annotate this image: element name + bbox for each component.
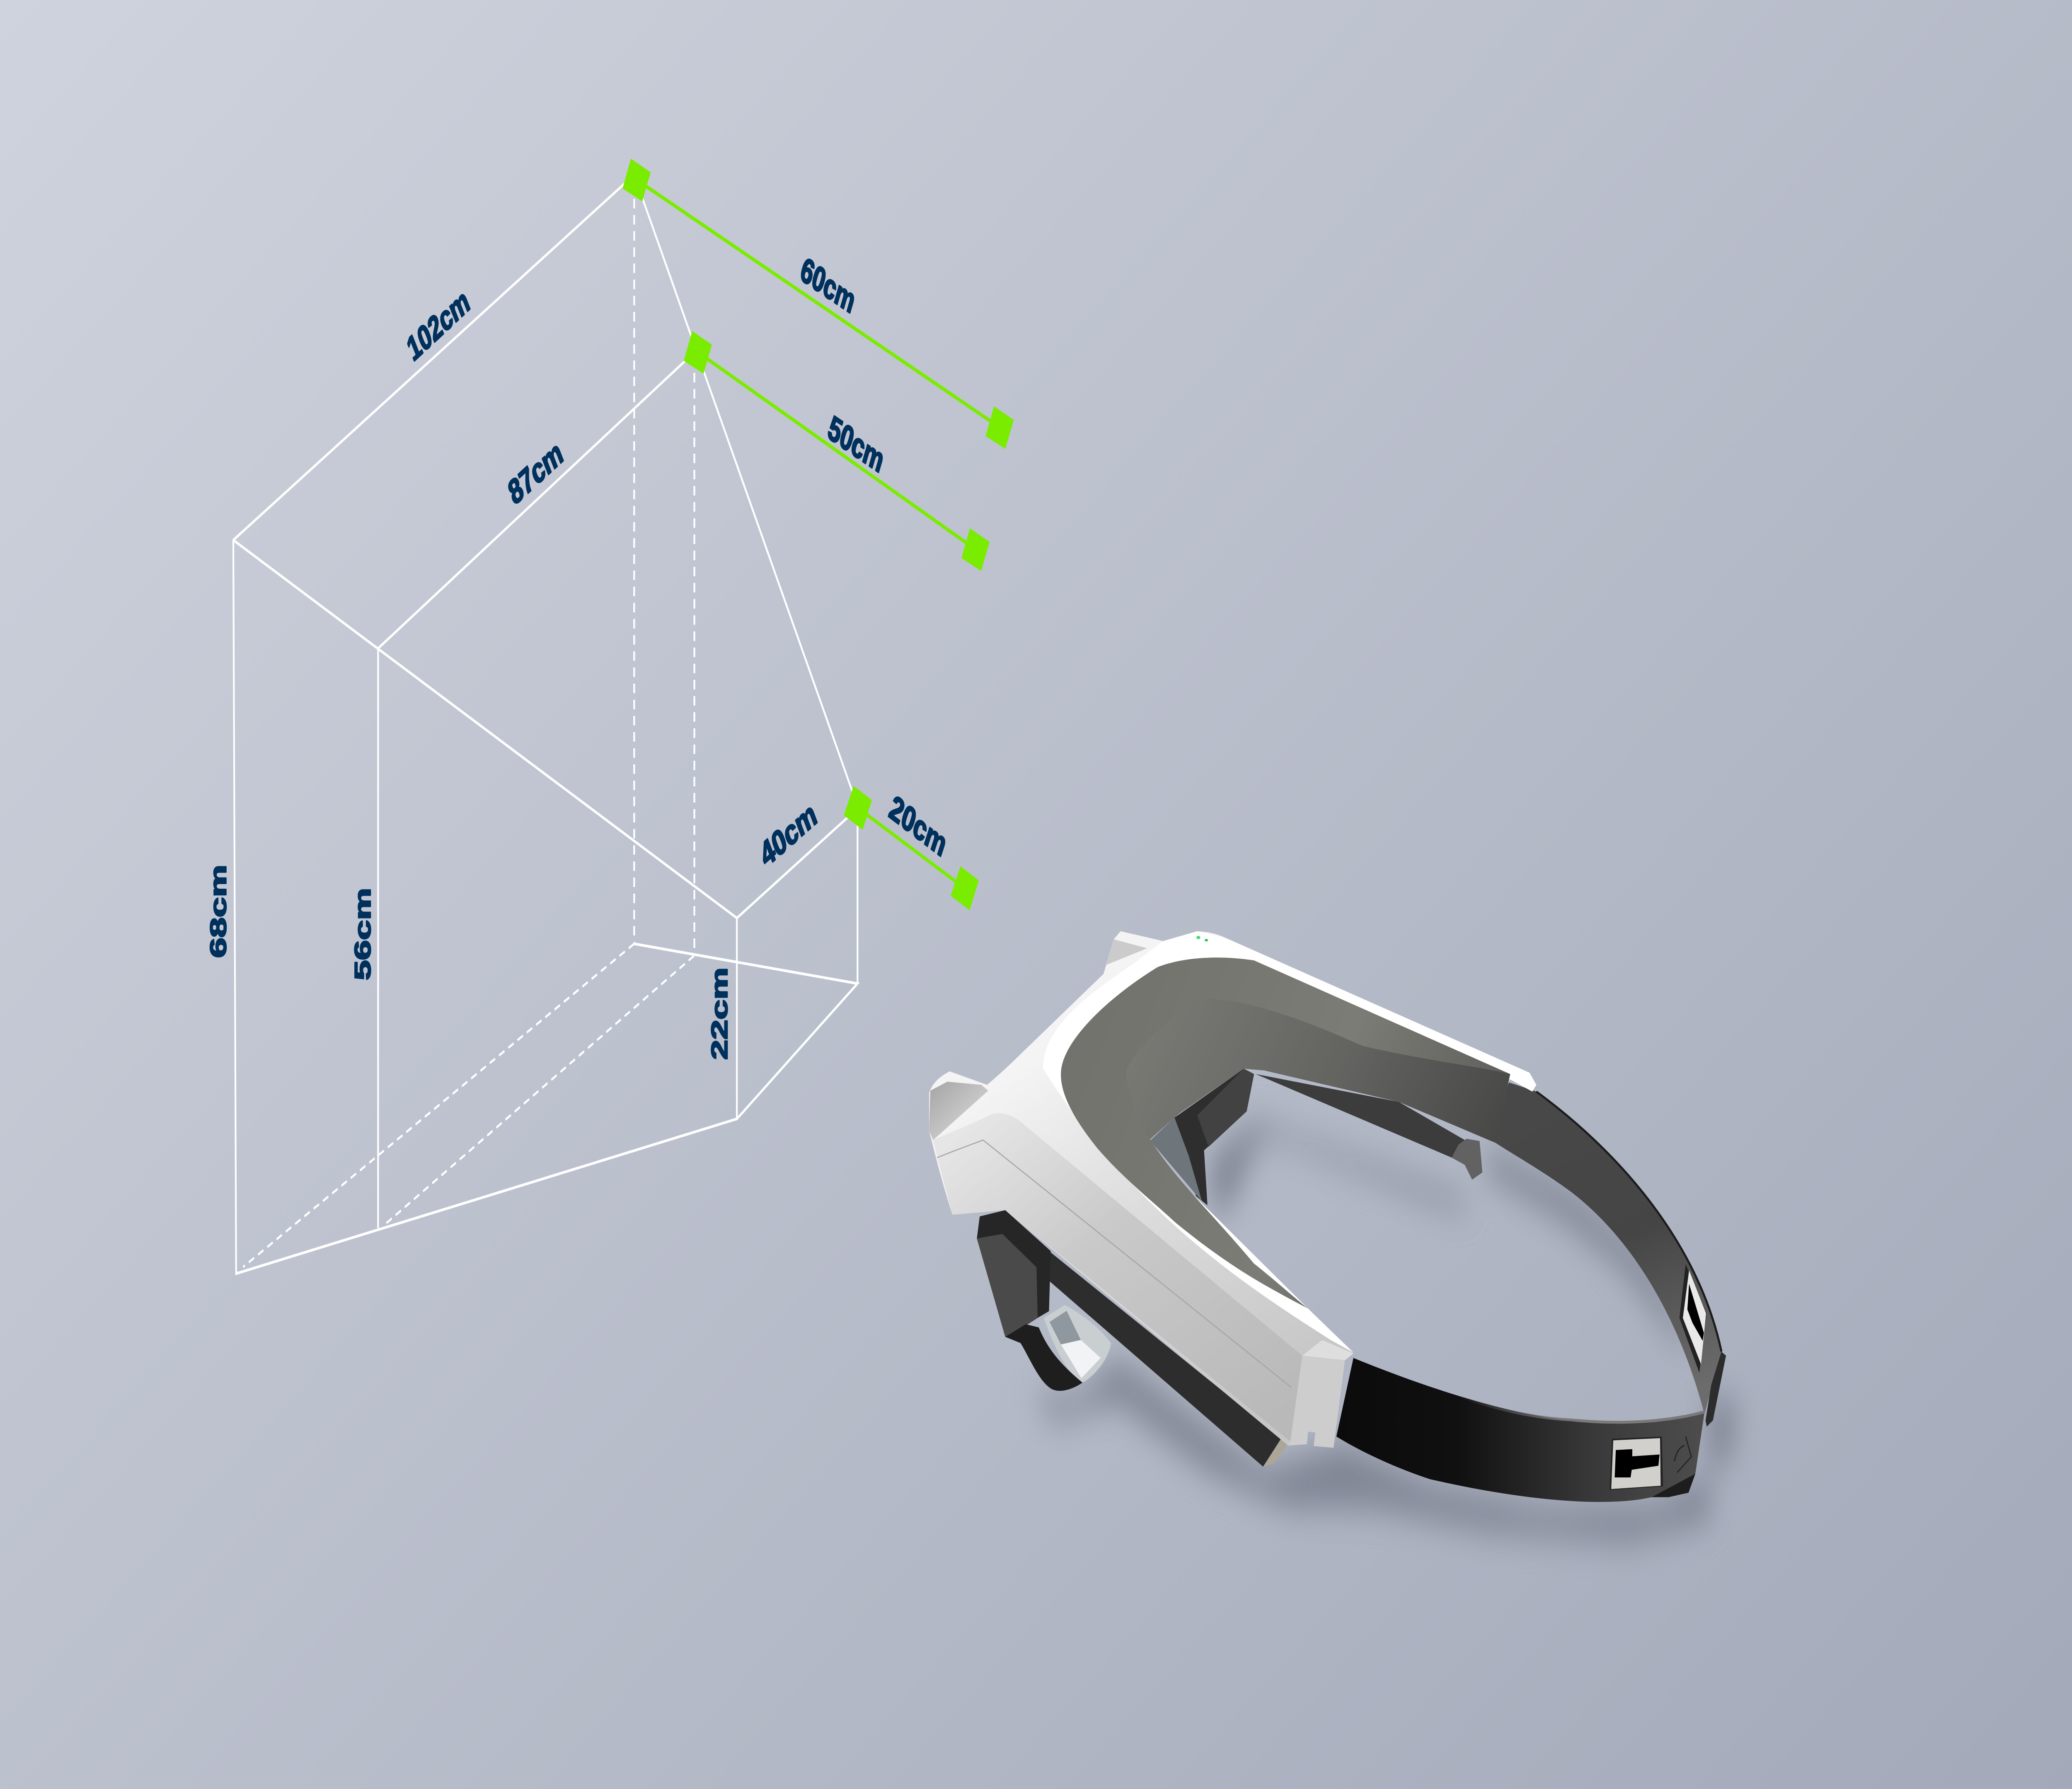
side badge frame: [1680, 1264, 1706, 1373]
left lug shading: [929, 1082, 988, 1140]
visor glass: [1150, 1118, 1202, 1201]
ground shadows: [1033, 1120, 1737, 1542]
end cap: [1288, 1354, 1353, 1448]
side badge slot: [1687, 1284, 1704, 1341]
solid frame edges: [233, 175, 858, 1274]
dimension line: 60cm: [637, 180, 1000, 428]
dark bar under the arm: [1048, 1251, 1281, 1467]
end cap chamfer: [1302, 1340, 1353, 1360]
inner visor parts: [1150, 1069, 1482, 1205]
handle: 60cm end: [986, 406, 1014, 449]
strap top lip: [1459, 1396, 1704, 1422]
handle: top apex: [622, 159, 651, 201]
strap underside: [1652, 1474, 1695, 1497]
wireframe: field of view volume: [233, 175, 858, 1274]
label 40cm: 40cm: [756, 795, 821, 875]
lower optics assembly: [977, 1210, 1287, 1467]
rear badge slot: [1615, 1449, 1660, 1477]
lower dark strip under the forehead pad: [1256, 1074, 1482, 1180]
rear badge frame: [1610, 1436, 1663, 1490]
rear badge plate: [1611, 1438, 1661, 1489]
label 56cm: 56cm: [350, 888, 375, 980]
lens ring: [1005, 1324, 1082, 1391]
hinge plate: [977, 1234, 1038, 1337]
side badge plate: [1683, 1270, 1706, 1364]
dashed floor hidden edges: [243, 944, 694, 1267]
left strut: [1174, 1069, 1254, 1205]
lens facet light: [1061, 1340, 1101, 1378]
strap surface: [1336, 1358, 1704, 1502]
label 20cm: 20cm: [885, 788, 951, 864]
dimension line: 50cm: [698, 352, 975, 549]
dimension line: 20cm: [858, 808, 965, 888]
status light right: [1205, 939, 1208, 942]
forehead pad inner: [1127, 998, 1510, 1143]
label 102cm: 102cm: [403, 281, 474, 369]
label 22cm: 22cm: [707, 967, 732, 1060]
forehead pad outer: [1061, 957, 1510, 1308]
handle: middle apex: [684, 331, 712, 374]
side face: [933, 1113, 1302, 1441]
strap outer lip: [1536, 1092, 1721, 1351]
lower headband strap: [1336, 1358, 1704, 1502]
crease line: [937, 1140, 1292, 1388]
label 87cm: 87cm: [504, 433, 567, 513]
lens facet dark: [1050, 1311, 1081, 1344]
label 68cm: 68cm: [206, 865, 231, 958]
status light left: [1196, 936, 1201, 939]
rear headband strap: [1496, 1082, 1726, 1426]
bright white rim: [1043, 931, 1536, 1353]
strap surface: [1496, 1082, 1721, 1414]
strip end clip: [1452, 1139, 1482, 1180]
lens element: [1044, 1305, 1111, 1383]
dimension labels: [206, 250, 951, 1060]
left strut plate: [1197, 1069, 1254, 1147]
label 50cm: 50cm: [824, 409, 888, 481]
silver tip: [1263, 1438, 1287, 1467]
handle: near apex: [844, 786, 872, 830]
handle: 20cm end: [951, 866, 979, 910]
hinge block: [977, 1210, 1051, 1337]
top lug shading: [1106, 939, 1147, 965]
label 60cm: 60cm: [797, 250, 859, 321]
green dimension lines and handles: [622, 159, 1014, 910]
headset product illustration: [929, 931, 1737, 1542]
logo mark: [1674, 1436, 1691, 1472]
handle: 50cm end: [961, 528, 990, 571]
white visor body: [929, 931, 1536, 1448]
body silhouette: [929, 931, 1536, 1448]
strap end cap: [1706, 1351, 1726, 1426]
dashed vertical hidden edges: [634, 199, 695, 956]
